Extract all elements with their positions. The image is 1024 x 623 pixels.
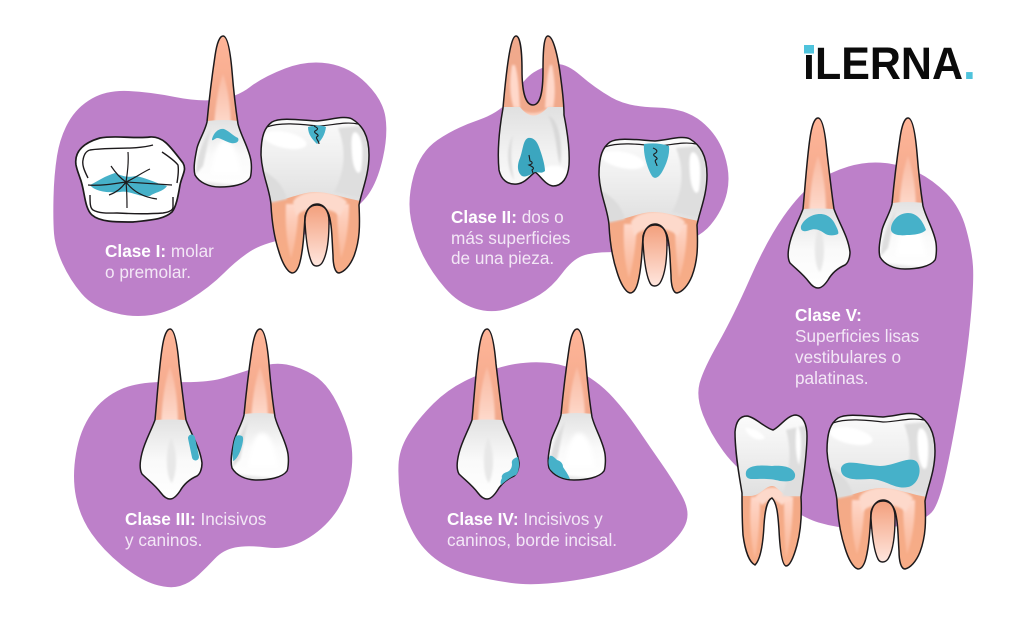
panel: Clase V upper teeth bbox=[784, 116, 940, 293]
logo: iLERNA: iLERNA bbox=[803, 38, 963, 89]
text: Clase III: y caninos. bbox=[125, 530, 202, 550]
icon: molar with caries bbox=[255, 110, 375, 280]
text: Clase V: palatinas. bbox=[795, 368, 869, 388]
logo: iLERNA: . bbox=[963, 37, 976, 89]
icon: two-root molar with caries bbox=[734, 414, 808, 567]
text: Clase II: más superficies bbox=[451, 228, 570, 248]
text: Clase I: Clase I: molar bbox=[105, 241, 214, 261]
text: Clase II: Clase II: dos o bbox=[451, 207, 564, 227]
icon: incisor with caries bbox=[545, 327, 609, 484]
panel: Clase II teeth bbox=[490, 30, 713, 300]
panel: Clase I teeth bbox=[76, 34, 375, 280]
background blob: Clase I bbox=[53, 62, 386, 316]
icon: three-root molar with caries bbox=[821, 406, 941, 576]
text: Clase I: o premolar. bbox=[105, 262, 191, 282]
icon: canine with caries bbox=[136, 327, 204, 504]
background blob: Clase V bbox=[698, 162, 973, 529]
text: Clase V: Superficies lisas bbox=[795, 326, 919, 346]
icon: incisor with caries bbox=[228, 327, 292, 484]
icon: premolar with caries bbox=[191, 34, 255, 191]
icon: molar with caries bbox=[593, 130, 713, 300]
text: Clase III: Clase III: Incisivos bbox=[125, 509, 266, 529]
background blob: Clase III bbox=[74, 364, 352, 587]
text: Clase IV: caninos, borde incisal. bbox=[447, 530, 617, 550]
text: Clase V: vestibulares o bbox=[795, 347, 901, 367]
icon: occlusal view of molar bbox=[76, 137, 185, 222]
panel: Clase V lower teeth bbox=[734, 412, 936, 570]
background blob: Clase IV bbox=[398, 362, 688, 584]
text: Clase IV: Clase IV: Incisivos y bbox=[447, 509, 603, 529]
icon: two-root premolar with caries bbox=[498, 35, 570, 187]
panel: Clase IV teeth bbox=[453, 327, 609, 504]
icon: canine with caries bbox=[784, 116, 852, 293]
text: Clase V: Clase V: bbox=[795, 305, 862, 325]
icon: canine with caries bbox=[453, 327, 521, 504]
text: Clase II: de una pieza. bbox=[451, 248, 554, 268]
panel: Clase III teeth bbox=[136, 327, 292, 504]
background blob: Clase II bbox=[409, 64, 729, 311]
icon: incisor with caries bbox=[876, 116, 940, 273]
